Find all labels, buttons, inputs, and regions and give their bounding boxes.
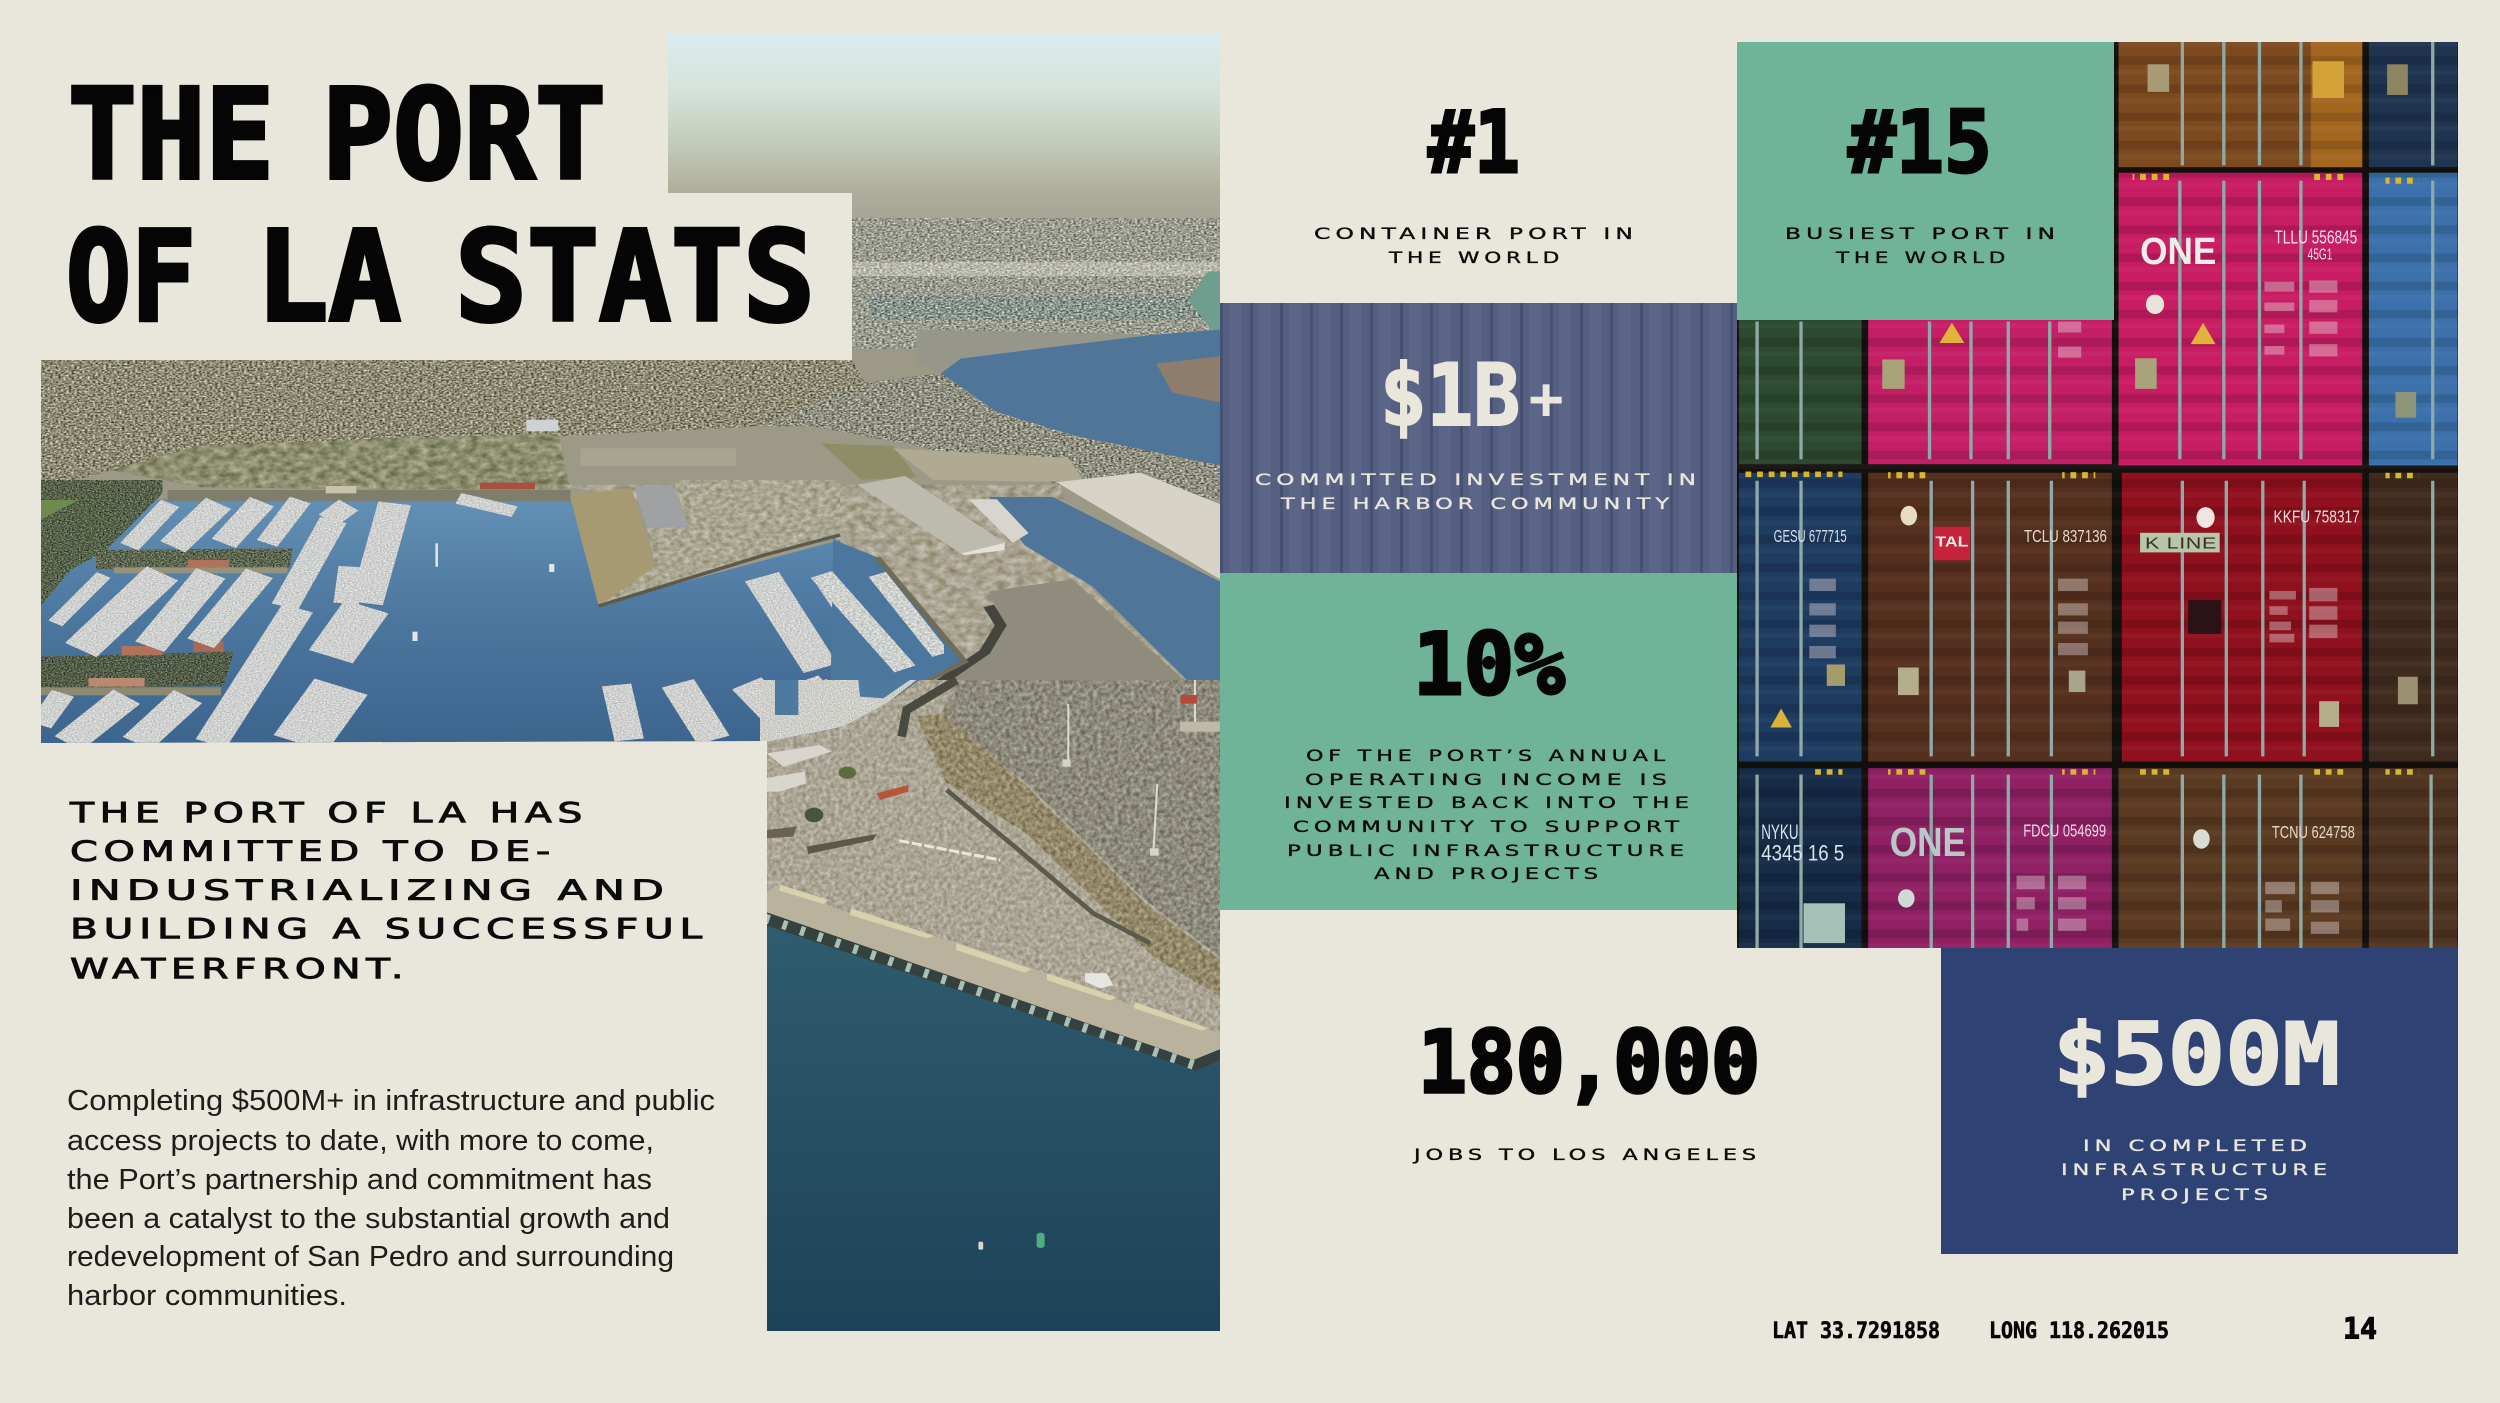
panel: $500M completed projects (1941, 948, 2458, 1254)
east bank (758, 373, 1220, 499)
grey shed (634, 485, 689, 528)
subheading: WATERFRONT. (70, 952, 409, 985)
stat number: 10% (1413, 615, 1565, 715)
land strip (917, 330, 1148, 349)
wharf layers (760, 680, 1220, 1063)
stat label (1284, 746, 1694, 883)
body paragraph: the Port’s partnership and commitment has (67, 1164, 652, 1196)
stat label: THE WORLD (1388, 248, 1564, 267)
subheading: INDUSTRIALIZING AND (70, 874, 670, 906)
title (66, 63, 815, 350)
stat number: $1B (1380, 346, 1520, 446)
brown pier (570, 488, 655, 606)
body paragraph: Completing $500M+ in infrastructure and public (67, 1085, 715, 1117)
stat number: #15 (1848, 93, 1992, 193)
stat label: INVESTED BACK INTO THE (1284, 793, 1694, 812)
container stack photo: TAL (1935, 533, 1969, 550)
stat label: BUSIEST PORT IN (1785, 224, 2060, 243)
stat label: JOBS TO LOS ANGELES (1413, 1145, 1761, 1164)
panel: 10% operating income (1220, 573, 1737, 910)
container stack photo: ONE (1890, 820, 1966, 865)
container stack photo: TLLU 556845 (2274, 227, 2357, 248)
subheading: COMMITTED TO DE- (70, 834, 556, 868)
concrete pad (599, 480, 840, 606)
third row containers (1739, 473, 1862, 762)
panel: $1B+ investment: + (1528, 366, 1564, 435)
upper photo layers (41, 218, 1220, 760)
yard buildings (767, 745, 832, 767)
corrugation overlay (1737, 42, 2458, 954)
body paragraph: harbor communities. (67, 1280, 347, 1312)
fourth row containers (1739, 768, 1862, 952)
body paragraph: redevelopment of San Pedro and surrounding (67, 1241, 674, 1273)
asphalt (956, 580, 1184, 680)
stat number: #1 (1428, 93, 1520, 193)
stat label: CONTAINER PORT IN (1314, 224, 1638, 243)
road (902, 680, 957, 737)
sailboats (435, 543, 438, 567)
stat label (2061, 1136, 2332, 1204)
placards (2148, 64, 2169, 92)
subheading (69, 796, 708, 985)
stat label: THE HARBOR COMMUNITY (1280, 494, 1674, 513)
inner channel (989, 496, 1220, 680)
title: LA (256, 205, 401, 350)
quay deck (765, 884, 1220, 1063)
coordinates footer: LAT 33.7291858 (1772, 1319, 1940, 1344)
panel: $1B+ investment (1220, 303, 1737, 573)
panel: #15 busiest port (1737, 42, 2114, 320)
stat label: COMMITTED INVESTMENT IN (1255, 470, 1701, 489)
marina boat rows (40, 498, 840, 743)
field (112, 434, 570, 490)
body paragraph (67, 1085, 715, 1312)
pier pilings (765, 912, 1220, 1071)
container stack photo: NYKU (1761, 821, 1799, 844)
marina layers (40, 480, 840, 747)
stat label (1785, 224, 2060, 267)
asphalt apron (943, 680, 1220, 957)
container stack photo: K LINE (2145, 535, 2216, 553)
container stack photo (1737, 42, 2458, 954)
stat label (1255, 470, 1701, 513)
lamp posts (1068, 680, 1195, 853)
warehouse sheds on quay (779, 885, 1208, 1031)
boats and channels at top (760, 680, 917, 743)
container stack photo: FDCU 054699 (2023, 822, 2106, 841)
quay land (760, 680, 1220, 1063)
top row containers (2119, 42, 2362, 167)
container stack photo: 4345 16 5 (1761, 840, 1844, 865)
subheading: THE PORT OF LA HAS (69, 796, 588, 829)
stat label: INFRASTRUCTURE (2061, 1160, 2332, 1179)
trees and shore (40, 480, 162, 607)
stat label: THE WORLD (1835, 248, 2010, 267)
basin water (40, 497, 840, 747)
container markings: ONE (2140, 229, 2216, 272)
curving road (936, 604, 1007, 680)
container stack photo: GESU 677715 (1774, 528, 1847, 546)
coordinates footer: LONG 118.262015 (1989, 1319, 2169, 1344)
panel: #1 container port (1314, 93, 1638, 267)
sky (668, 33, 1220, 223)
body paragraph: access projects to date, with more to come, (67, 1125, 654, 1157)
second row containers (1739, 306, 1862, 464)
vegetated edge (917, 713, 1220, 997)
open water (767, 917, 1220, 1331)
stat label: OPERATING INCOME IS (1305, 770, 1672, 789)
stat label: OF THE PORT’S ANNUAL (1306, 746, 1670, 765)
main channel (941, 330, 1220, 465)
stat label: PROJECTS (2121, 1185, 2273, 1204)
wharf buildings (1057, 473, 1220, 579)
stat label: PUBLIC INFRASTRUCTURE (1287, 841, 1689, 860)
foreground town (41, 360, 865, 490)
title: STATS (455, 205, 815, 350)
stat label: COMMUNITY TO SUPPORT (1293, 817, 1684, 836)
page number: 14 (2343, 1312, 2377, 1346)
weight plates (1809, 280, 2339, 934)
container stack photo: TCNU 624758 (2272, 823, 2355, 842)
container stack photo: KKFU 758317 (2274, 508, 2360, 527)
title: THE (68, 63, 274, 208)
coordinates footer (1772, 1319, 2169, 1344)
east marina extension (806, 538, 969, 701)
stat number: 180,000 (1418, 1013, 1760, 1113)
container stack photo: TCLU 837136 (2024, 528, 2107, 546)
title: OF (66, 205, 196, 350)
buoys (978, 1233, 1045, 1250)
stat number: $500M (2053, 1005, 2340, 1105)
gardens (40, 548, 293, 688)
panel: 180,000 jobs (1413, 1013, 1761, 1164)
subheading: BUILDING A SUCCESSFUL (70, 912, 708, 945)
land toward asphalt (558, 484, 1184, 680)
hazard stripes (1743, 174, 2419, 775)
stat label: IN COMPLETED (2083, 1136, 2312, 1155)
stat label (1314, 224, 1638, 267)
body paragraph: been a catalyst to the substantial growth and (67, 1203, 670, 1235)
stat label: AND PROJECTS (1374, 864, 1603, 883)
container stack photo: 45G1 (2308, 246, 2332, 264)
title: PORT (322, 63, 606, 208)
aerial photo of the harbor (40, 33, 1221, 1333)
door rods (1757, 42, 2433, 952)
top quay (168, 490, 571, 501)
